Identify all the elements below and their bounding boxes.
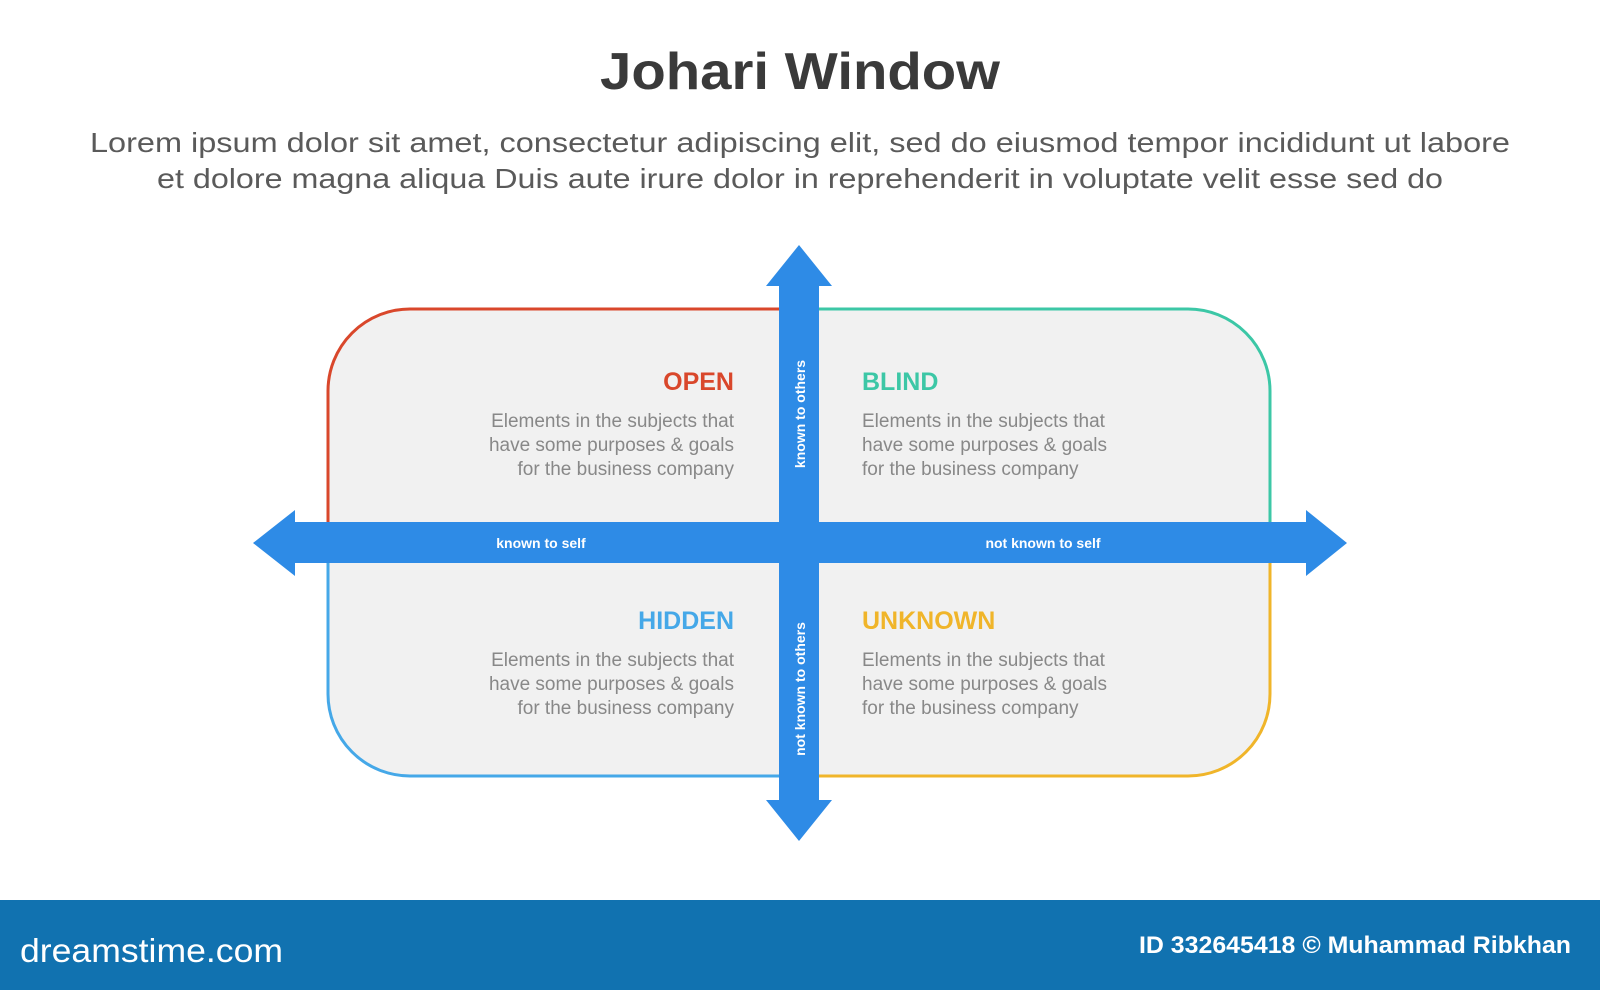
window box bbox=[328, 309, 1270, 776]
quadrant: blind: for the business company bbox=[862, 459, 1079, 480]
axis labels: not known to self bbox=[985, 535, 1101, 551]
quadrant: hidden: for the business company bbox=[517, 698, 734, 719]
axis labels bbox=[496, 360, 1101, 756]
subtitle: et dolore magna aliqua Duis aute irure dolor in reprehenderit in voluptate velit esse sed do bbox=[157, 163, 1443, 194]
quadrant: unknown: for the business company bbox=[862, 698, 1079, 719]
quadrant: unknown: Elements in the subjects that bbox=[862, 650, 1106, 671]
footer: ID 332645418 © Muhammad Ribkhan bbox=[1139, 932, 1571, 959]
quadrant: hidden: have some purposes & goals bbox=[489, 674, 734, 695]
quadrant: unknown bbox=[862, 607, 1107, 719]
quadrant: hidden bbox=[489, 607, 735, 719]
axis labels: known to others bbox=[792, 360, 808, 468]
quadrant: open: OPEN bbox=[663, 368, 734, 396]
quadrant: blind: Elements in the subjects that bbox=[862, 411, 1106, 432]
quadrant: unknown: have some purposes & goals bbox=[862, 674, 1107, 695]
axis labels: known to self bbox=[496, 535, 586, 551]
horizontal arrow bbox=[253, 510, 1347, 576]
quadrant: open bbox=[489, 368, 735, 480]
quadrant: blind: BLIND bbox=[862, 368, 938, 396]
footer: dreamstime.com bbox=[20, 932, 283, 969]
footer bbox=[0, 900, 1600, 990]
vertical arrow bbox=[766, 245, 832, 841]
quadrant: open: have some purposes & goals bbox=[489, 435, 734, 456]
title: Johari Window bbox=[600, 43, 1001, 101]
quadrant: hidden: Elements in the subjects that bbox=[491, 650, 735, 671]
subtitle: Lorem ipsum dolor sit amet, consectetur adipiscing elit, sed do eiusmod tempor incididunt ut labore bbox=[90, 127, 1510, 158]
quadrant: open: Elements in the subjects that bbox=[491, 411, 735, 432]
quadrant: unknown: UNKNOWN bbox=[862, 607, 995, 635]
quadrant: hidden: HIDDEN bbox=[638, 607, 734, 635]
subtitle bbox=[90, 127, 1510, 194]
quadrant: blind: have some purposes & goals bbox=[862, 435, 1107, 456]
quadrant: open: for the business company bbox=[517, 459, 734, 480]
quadrant: blind bbox=[862, 368, 1107, 480]
axis labels: not known to others bbox=[792, 622, 808, 756]
